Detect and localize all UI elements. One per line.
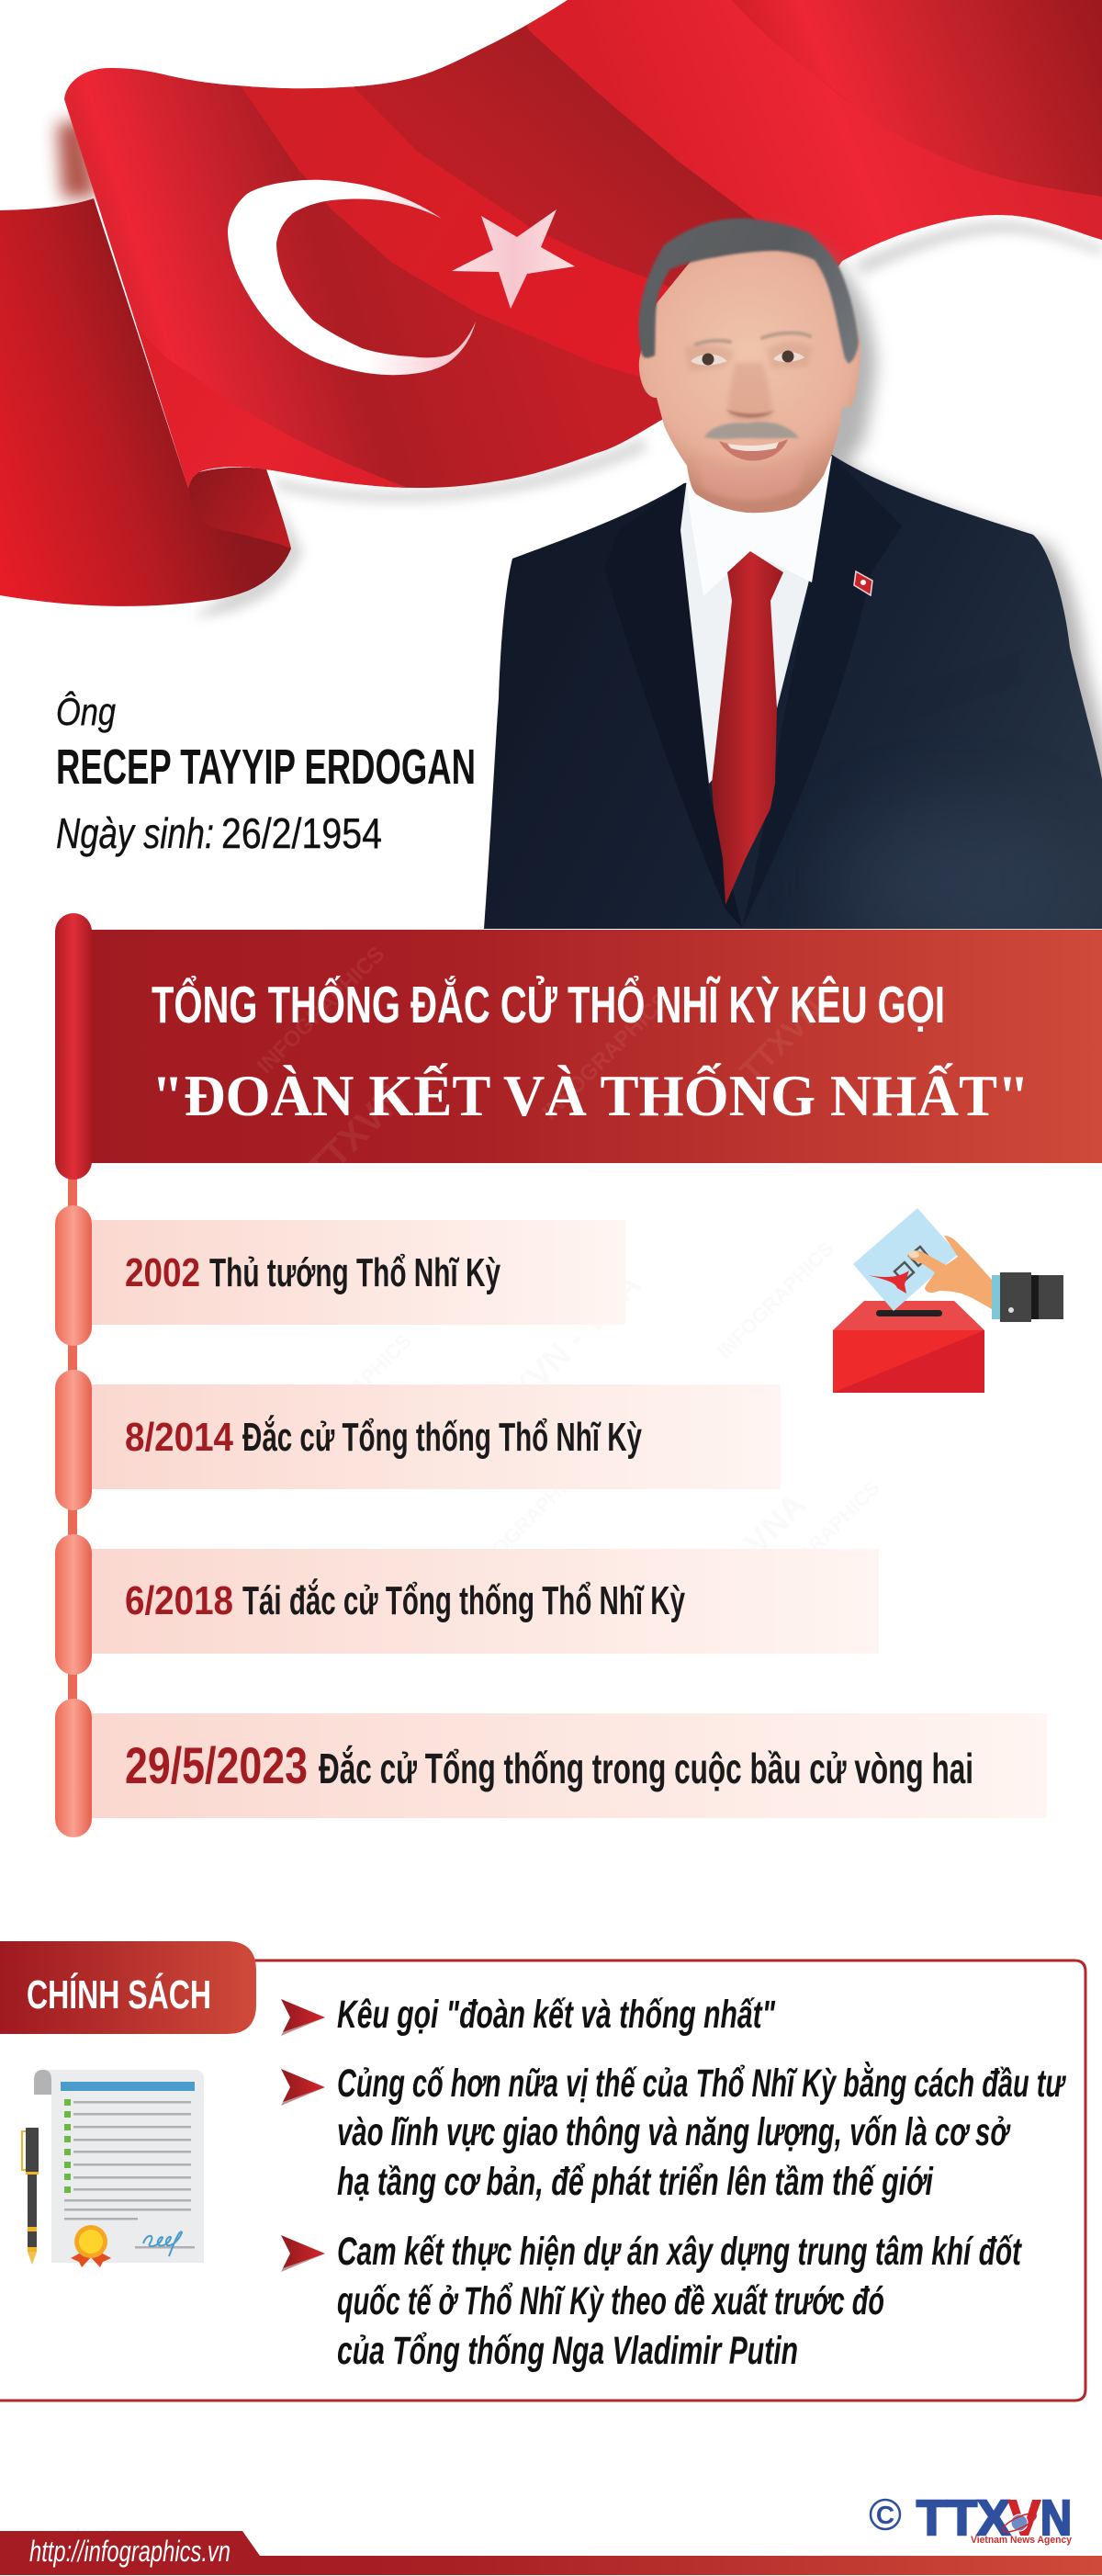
- policy panel: [0, 1941, 1085, 2401]
- policy text 2: [337, 2061, 1066, 2204]
- watermarks: [253, 942, 830, 1191]
- watermarks: INFOGRAPHICS: [253, 942, 389, 1079]
- paper: [46, 2070, 204, 2263]
- timeline item: 6/2018: [55, 1534, 879, 1675]
- timeline item: 6/2018: Tái đắc cử Tổng thống Thổ Nhĩ Kỳ: [242, 1577, 685, 1623]
- policy text 1: Kêu gọi "đoàn kết và thống nhất": [337, 1993, 775, 2037]
- mouth: [719, 439, 788, 461]
- footer strip: [0, 2556, 1102, 2575]
- portrait shadow: [749, 228, 1102, 928]
- url: http://infographics.vn: [29, 2535, 231, 2568]
- pen: [22, 2128, 39, 2265]
- flag lower bright band: [136, 323, 408, 488]
- arrow 2: [281, 2069, 325, 2106]
- agency letters: TTX: [916, 2491, 1010, 2546]
- footer: [0, 2531, 1102, 2575]
- flag band L2 to L3: [354, 17, 756, 287]
- box lid: [833, 1301, 984, 1330]
- timeline item: 2002: Thủ tướng Thổ Nhĩ Kỳ: [209, 1250, 500, 1295]
- nose: [725, 409, 776, 418]
- eyebrows: [696, 333, 810, 345]
- name: RECEP TAYYIP ERDOGAN: [56, 740, 476, 795]
- flag crest region: [514, 0, 1102, 276]
- left lapel: [604, 483, 742, 928]
- timeline connector: [68, 1176, 77, 1727]
- logo: TTXVN: V: [1008, 2491, 1040, 2546]
- flag band L1 to L2: [241, 85, 669, 377]
- watermarks: INFOGRAPHICS: [537, 988, 674, 1124]
- honorific: Ông: [56, 690, 116, 733]
- agency name: Vietnam News Agency: [971, 2535, 1073, 2546]
- signature: [143, 2231, 182, 2256]
- suit: [484, 455, 1102, 929]
- watermarks on timeline: INFOGRAPHICS: [713, 1237, 838, 1363]
- panel border: [0, 1960, 1085, 2401]
- head and face: [639, 230, 860, 513]
- timeline item: 2002: 2002: [125, 1250, 200, 1295]
- copyright symbol: C: [876, 2501, 894, 2529]
- box front: [833, 1330, 984, 1393]
- slot: [876, 1310, 942, 1316]
- watermarks on timeline: INFOGRAPHICS: [290, 1329, 416, 1455]
- timeline item: 8/2014: 8/2014: [125, 1415, 233, 1460]
- necktie: [712, 551, 783, 905]
- watermarks on timeline: [290, 1237, 884, 1659]
- timeline item: 8/2014: [55, 1370, 781, 1510]
- globe: [1000, 2510, 1039, 2536]
- face shading: [684, 342, 813, 501]
- watermarks on timeline: INFOGRAPHICS: [465, 1458, 590, 1584]
- crescent: [228, 180, 476, 375]
- watermarks: TTXVN: [298, 1078, 412, 1191]
- suit highlight: [855, 821, 1037, 929]
- tab label: CHÍNH SÁCH: [27, 1972, 211, 2017]
- mustache: [704, 422, 799, 439]
- hair: [638, 219, 859, 364]
- watermarks on timeline: TTXVN - VNA: [475, 1265, 647, 1439]
- flag back panel: [0, 198, 291, 606]
- icon: ballot box: [833, 1208, 1063, 1393]
- timeline item: 29/5/2023: 29/5/2023: [125, 1736, 308, 1794]
- arrow 1: [281, 1999, 325, 2036]
- banner background: [87, 930, 1102, 1163]
- banner pill: [55, 913, 92, 1180]
- flag right region: [732, 0, 1102, 197]
- flag fold: [188, 468, 291, 548]
- suit pocket: [838, 650, 1021, 744]
- name block: [56, 690, 476, 857]
- shirt: [680, 456, 832, 784]
- birth date: Ngày sinh:: [56, 809, 214, 857]
- star: [452, 209, 575, 309]
- hand: [908, 1236, 992, 1309]
- policy text 3: của Tổng thống Nga Vladimir Putin: [337, 2329, 798, 2373]
- right lapel: [742, 455, 902, 928]
- eyes: [691, 351, 804, 366]
- footer tab: [0, 2531, 260, 2575]
- paper curl: [34, 2070, 51, 2095]
- name block: 26/2/1954: [221, 809, 382, 857]
- blue heading bar: [61, 2082, 195, 2091]
- headline banner: [55, 913, 1102, 1191]
- watermarks on timeline: INFOGRAPHICS: [759, 1476, 884, 1602]
- timeline item: 8/2014: Đắc cử Tổng thống Thổ Nhĩ Kỳ: [242, 1414, 642, 1460]
- timeline item: 2002: [55, 1205, 625, 1346]
- flag main panel: [64, 0, 1102, 488]
- policy tab: [0, 1941, 256, 2034]
- logo: TTXVN: N: [1040, 2491, 1072, 2546]
- arrow 3: [281, 2235, 325, 2272]
- logo: TTXVN: [871, 2491, 1073, 2546]
- watermarks: TTXVN: [734, 992, 830, 1090]
- copyright symbol: [871, 2500, 900, 2529]
- checklist: [64, 2099, 71, 2193]
- headline line 2: "ĐOÀN KẾT VÀ THỐNG NHẤT": [152, 1063, 1029, 1128]
- collar: [687, 456, 832, 596]
- flag shadow: [57, 119, 1102, 617]
- person portrait: [484, 219, 1102, 955]
- timeline item: 29/5/2023: [55, 1699, 1047, 1837]
- timeline item: 6/2018: 6/2018: [125, 1578, 233, 1623]
- lapel pin: [854, 571, 872, 595]
- ballot marks: [894, 1247, 928, 1282]
- ballot paper: [853, 1208, 958, 1311]
- Turkish flag: [0, 0, 1102, 617]
- policy text 3: [337, 2230, 1022, 2373]
- icon: document and pen: [22, 2070, 204, 2267]
- medal: [71, 2225, 111, 2267]
- cuff: [992, 1275, 1001, 1319]
- watermarks on timeline: TTXVN - VNA: [640, 1486, 813, 1659]
